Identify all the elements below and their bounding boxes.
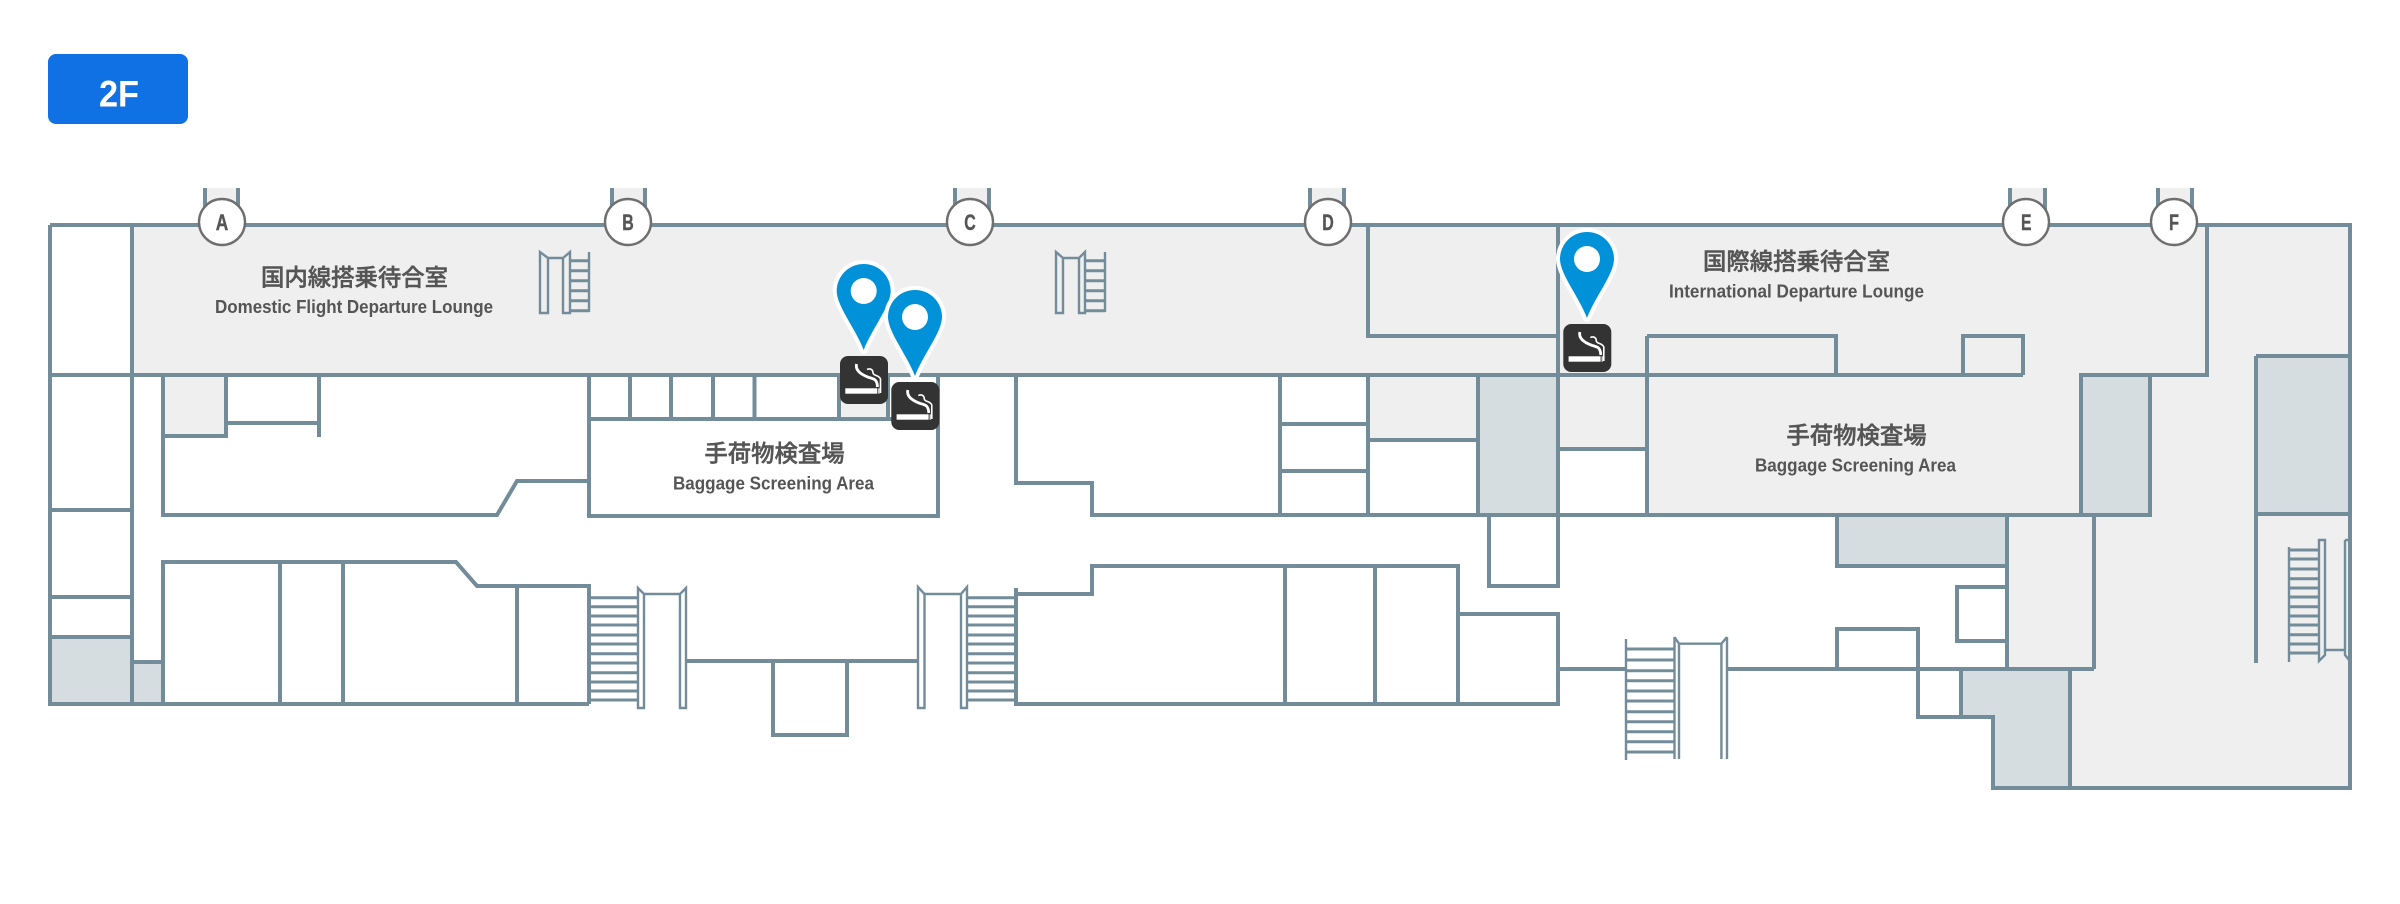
escalator and stairs: domestic lounge right: [1056, 252, 1105, 313]
gate A: A: [216, 210, 228, 235]
gate stub walls: [205, 188, 2192, 225]
label: baggage screening area right: Baggage Screening Area: [1755, 454, 1957, 476]
icon: smoking area 3: [1563, 324, 1611, 372]
escalator and stairs: domestic lounge left: [540, 252, 589, 313]
icon: smoking area 2: [891, 382, 939, 430]
gate D: D: [1322, 210, 1334, 235]
label: international departure lounge: International Departure Lounge: [1669, 280, 1924, 302]
escalator and stairs: east wing: [2289, 540, 2349, 662]
label: domestic departure lounge: Domestic Flight Departure Lounge: [215, 296, 493, 317]
gate C: [947, 199, 993, 245]
label: baggage screening area right: [1755, 422, 1957, 476]
floor badge: 2F: 2F: [99, 72, 139, 114]
label: domestic departure lounge: 国内線搭乗待合室: [261, 264, 448, 290]
floor badge: 2F: [48, 54, 188, 124]
label: baggage screening area left: 手荷物検査場: [704, 440, 845, 466]
light grey floor areas: [132, 188, 2350, 788]
gate F: [2151, 199, 2197, 245]
label: international departure lounge: [1669, 248, 1924, 302]
escalator and stairs: lower right: [1626, 637, 1727, 760]
gate D: [1305, 199, 1351, 245]
label: baggage screening area right: 手荷物検査場: [1786, 422, 1927, 448]
gate F: F: [2169, 210, 2179, 235]
label: international departure lounge: 国際線搭乗待合室: [1703, 248, 1890, 274]
map pin 3: [1560, 232, 1614, 318]
blue-grey service areas: [50, 356, 2350, 788]
map pin 2: [888, 290, 942, 376]
label: baggage screening area left: [673, 440, 875, 494]
escalator and stairs: lower centre: [918, 587, 1015, 708]
gate E: [2003, 199, 2049, 245]
escalator and stairs: lower left: [589, 588, 686, 708]
gate B: B: [622, 210, 634, 235]
gate B: [605, 199, 651, 245]
gate A: [199, 199, 245, 245]
gate E: E: [2021, 210, 2032, 235]
label: domestic departure lounge: [215, 264, 493, 317]
label: baggage screening area left: Baggage Screening Area: [673, 472, 875, 494]
map pin 1: [837, 264, 891, 350]
gate C: C: [964, 210, 976, 235]
building walls: [50, 225, 2350, 788]
icon: smoking area 1: [840, 356, 888, 404]
